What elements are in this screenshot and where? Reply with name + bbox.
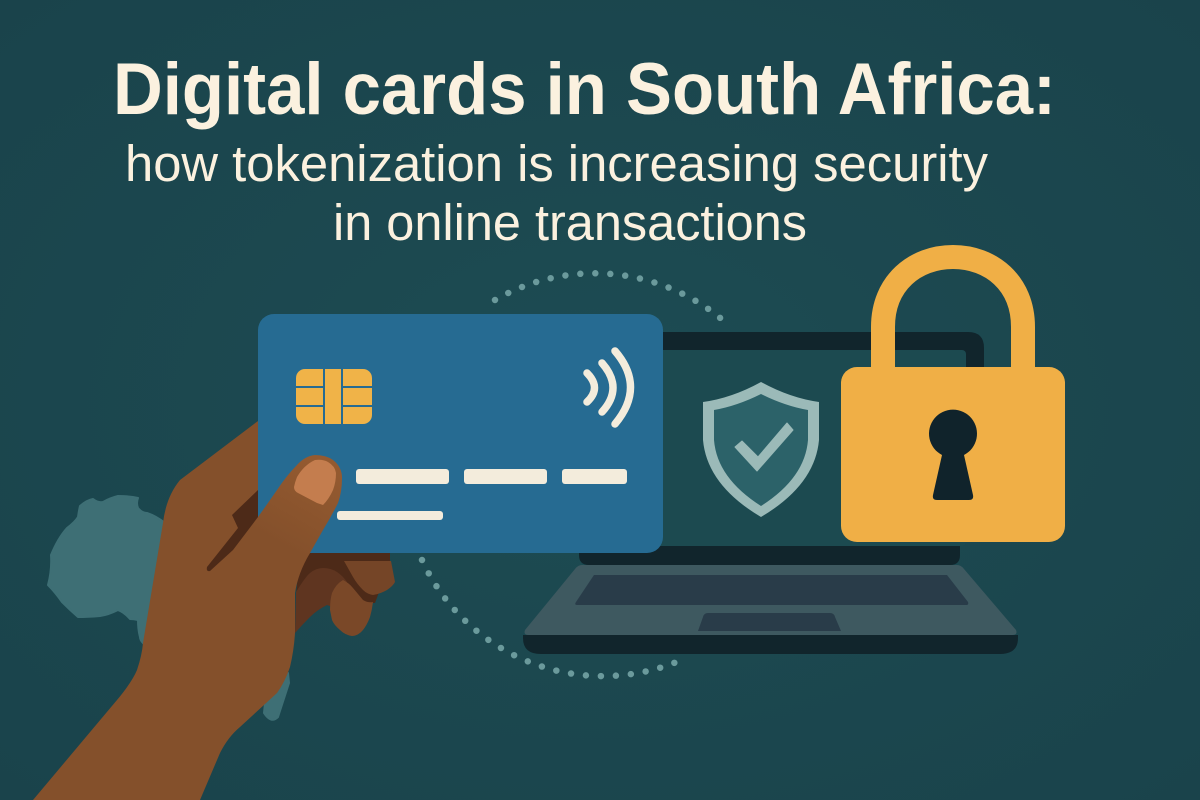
trackpad	[698, 613, 841, 631]
laptop	[523, 332, 1018, 654]
card number bars	[337, 469, 627, 520]
title	[113, 49, 1056, 251]
check mark	[735, 423, 793, 471]
finger shadow	[296, 553, 390, 603]
bank card	[258, 314, 663, 553]
little finger	[344, 561, 395, 595]
ring finger	[330, 580, 373, 636]
middle finger	[295, 568, 347, 633]
hand: thumb	[207, 455, 342, 593]
card body	[258, 314, 663, 553]
padlock body	[841, 367, 1065, 542]
thumbnail	[294, 460, 336, 505]
padlock shackle	[883, 257, 1023, 372]
card chip	[296, 369, 372, 424]
dotted circle	[422, 273, 725, 676]
icon: padlock	[841, 257, 1065, 542]
laptop base shadow edge	[523, 635, 1018, 654]
keyhole	[929, 410, 977, 500]
icon: security shield	[703, 382, 819, 517]
thumb crease	[207, 490, 258, 571]
keyboard	[575, 575, 968, 605]
icon: Africa map	[48, 496, 289, 720]
hand: fingers behind the card	[295, 553, 395, 636]
heading: main title: Digital cards in South Africa:	[113, 49, 1056, 130]
thumb shape	[230, 455, 342, 593]
laptop base	[524, 565, 1016, 635]
hand: palm and wrist	[33, 421, 310, 800]
laptop screen	[579, 332, 984, 565]
subtitle line 2: in online transactions	[333, 194, 807, 251]
laptop screen interior	[640, 350, 966, 546]
subtitle line 1: how tokenization is increasing security	[125, 135, 988, 192]
shield outline	[703, 382, 819, 517]
icon: contactless waves	[587, 351, 630, 424]
shield inner	[714, 394, 808, 506]
